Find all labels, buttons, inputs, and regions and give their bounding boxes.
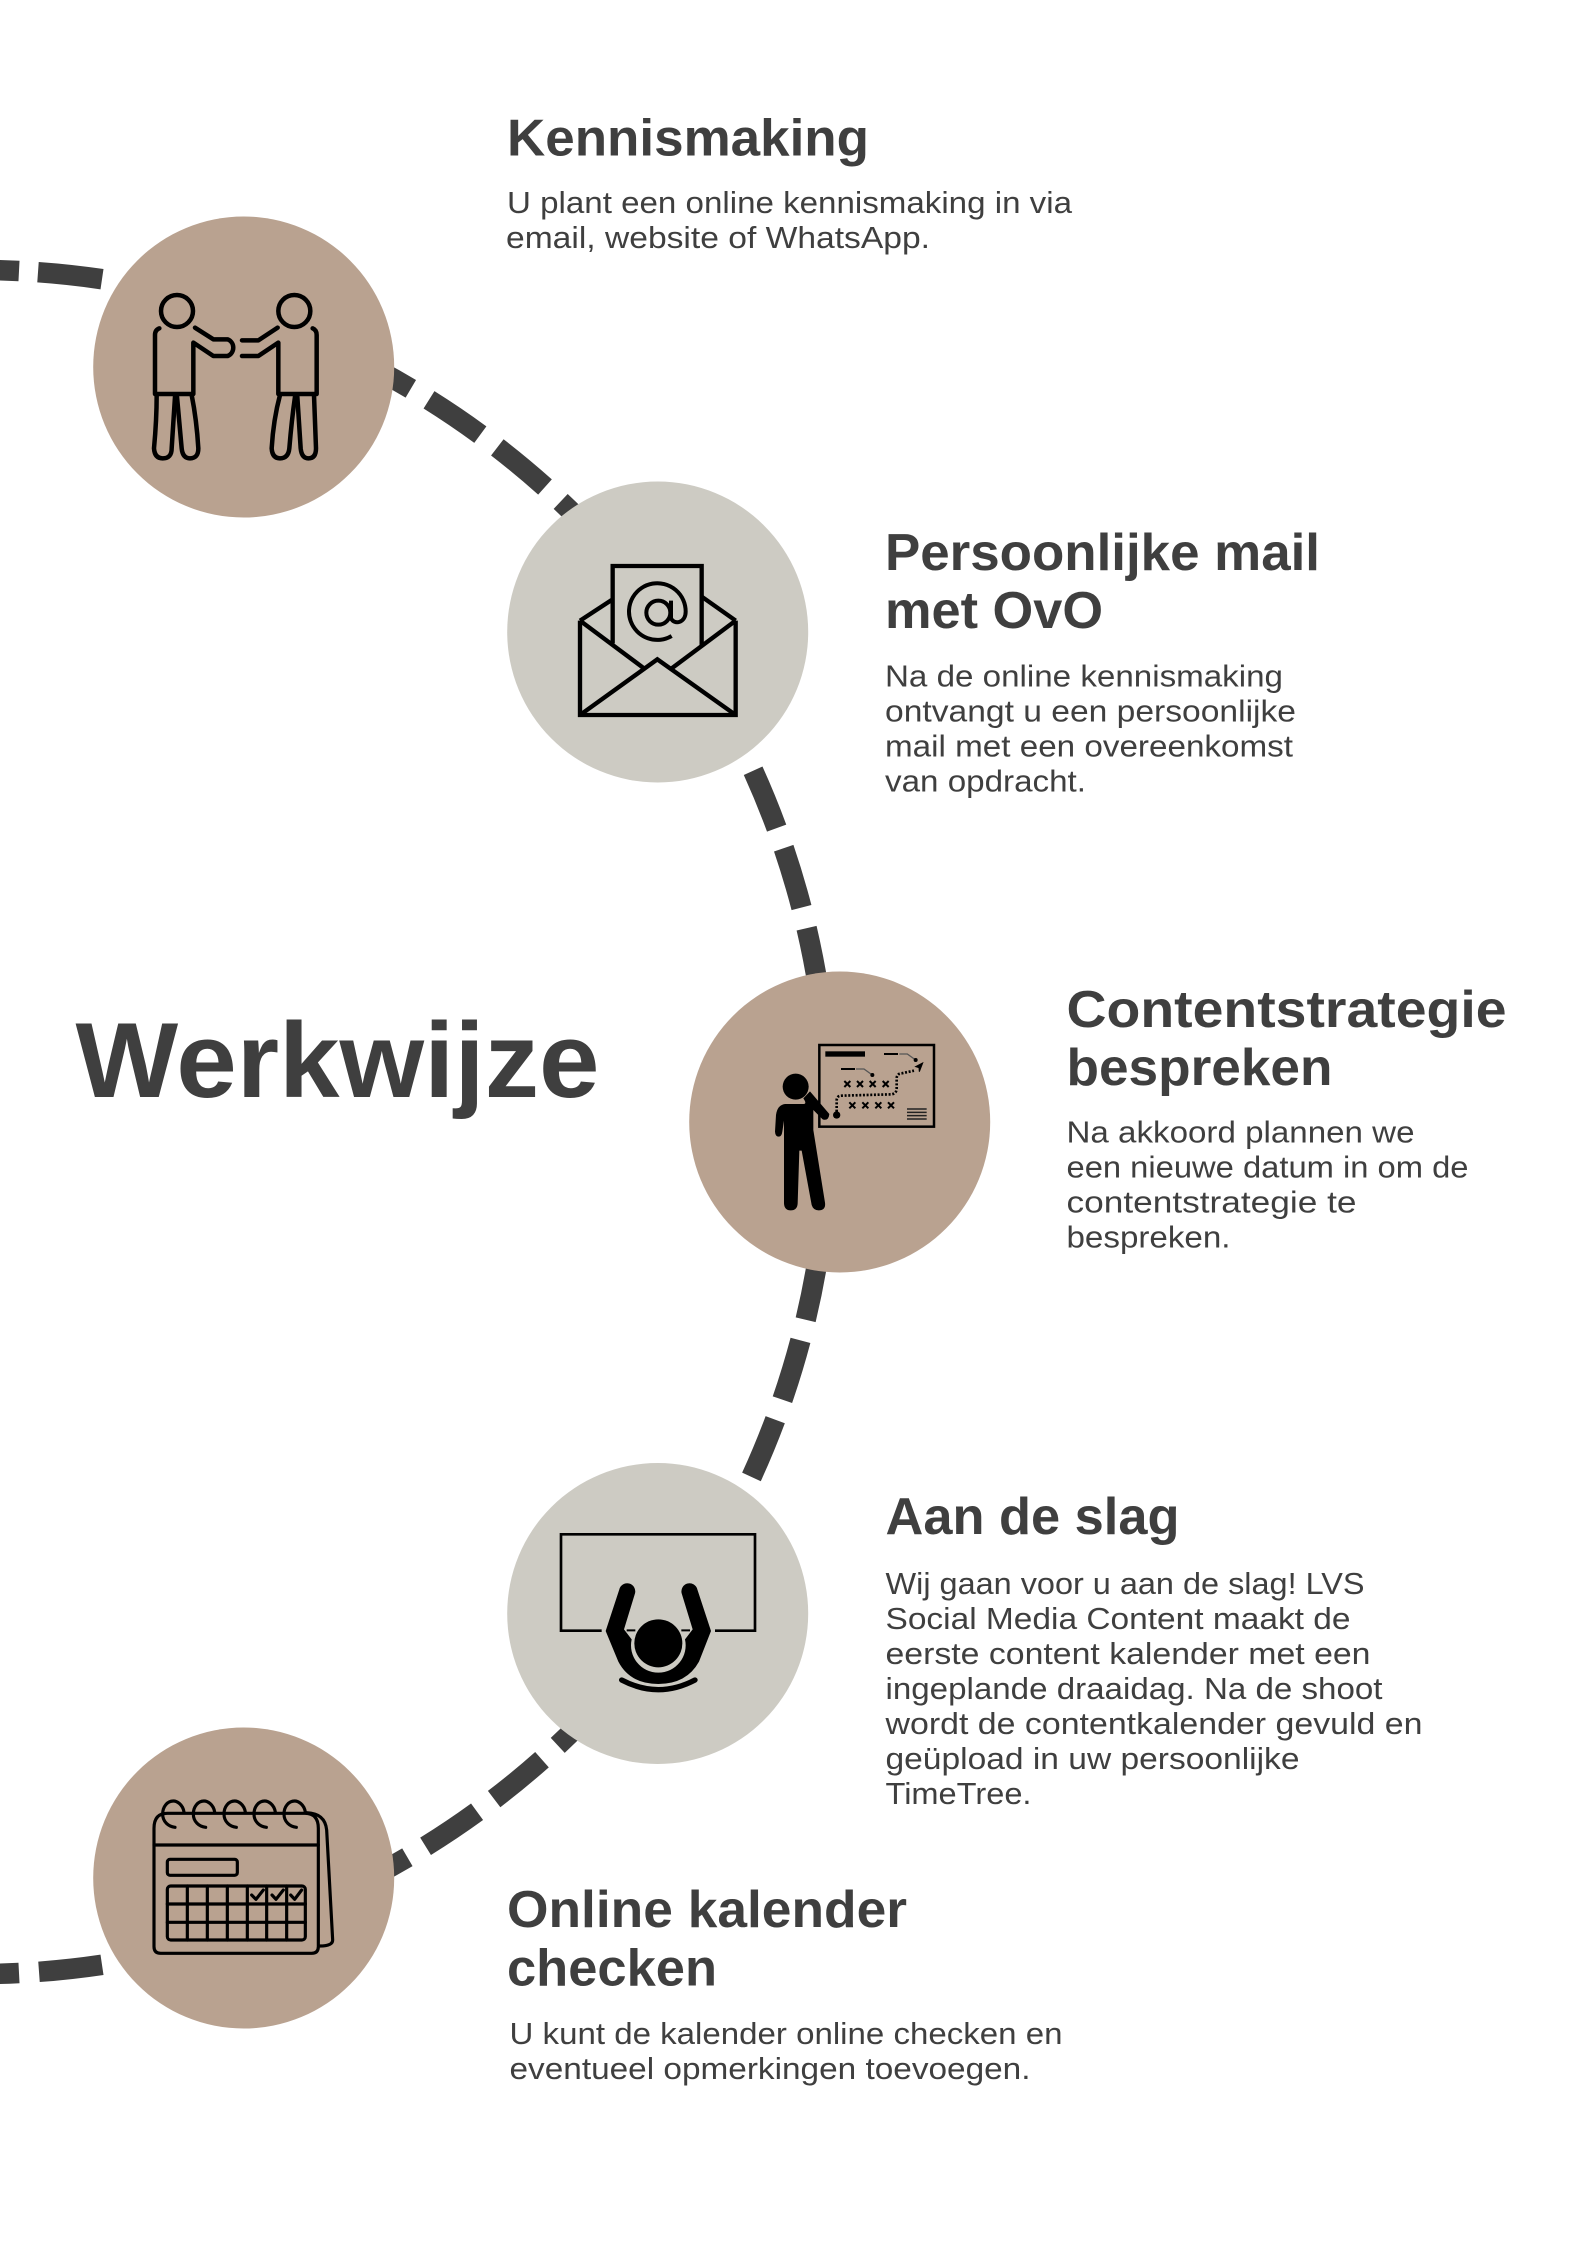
step 1 text (506, 185, 1073, 255)
step 1 text: email, website of WhatsApp. (506, 220, 930, 255)
step 3 heading: Contentstrategie (1066, 981, 1506, 1039)
step 4 text: Wij gaan voor u aan de slag! LVS (886, 1566, 1364, 1601)
step 4 text: wordt de contentkalender gevuld en (884, 1706, 1422, 1741)
step 3 text: contentstrategie te (1066, 1185, 1356, 1220)
circle: step 3 (689, 972, 990, 1272)
step 4 text: TimeTree. (886, 1776, 1032, 1811)
dashed arc connecting the steps (0, 270, 829, 1974)
step 5 text (510, 2016, 1062, 2086)
step 4 text: eerste content kalender met een (886, 1636, 1370, 1671)
step 4 text: ingeplande draaidag. Na de shoot (886, 1671, 1383, 1706)
icon: calendar with check marks (154, 1801, 333, 1953)
step 2 heading: Persoonlijke mail (885, 524, 1320, 582)
step 4 text: Social Media Content maakt de (886, 1601, 1350, 1636)
step 2 text (885, 659, 1296, 799)
icon: two people shaking hands (154, 295, 317, 458)
step 5 heading (507, 1881, 907, 1998)
step 5 heading: Online kalender (507, 1881, 907, 1939)
circle: step 1 (93, 216, 394, 518)
step 3 heading (1066, 981, 1506, 1097)
circle: step 2 (507, 482, 808, 782)
step 4 text: geüpload in uw persoonlijke (886, 1741, 1300, 1776)
step 5 text: eventueel opmerkingen toevoegen. (510, 2051, 1030, 2086)
icon: person at a desk seen from above (561, 1534, 755, 1690)
step 3 text: een nieuwe datum in om de (1066, 1150, 1468, 1185)
step 5 heading: checken (507, 1940, 717, 1998)
step 2 text: ontvangt u een persoonlijke (885, 694, 1296, 729)
circle: step 5 (93, 1728, 394, 2028)
step 1 text: U plant een online kennismaking in via (507, 185, 1073, 220)
step 2 heading: met OvO (885, 582, 1103, 640)
icon: open envelope with at sign (580, 566, 736, 715)
step 4 text (884, 1566, 1422, 1811)
step 3 text: bespreken. (1066, 1220, 1230, 1255)
step 4 heading: Aan de slag (886, 1488, 1180, 1546)
step 2 text: mail met een overeenkomst (885, 729, 1293, 764)
step 3 text (1066, 1115, 1468, 1255)
step 1 heading: Kennismaking (507, 110, 869, 168)
step 2 heading (885, 524, 1320, 640)
step 3 text: Na akkoord plannen we (1066, 1115, 1414, 1150)
icon: person presenting strategy on a board (775, 1045, 934, 1210)
title: Werkwijze (76, 1000, 600, 1120)
step 3 heading: bespreken (1066, 1039, 1332, 1097)
step 2 text: van opdracht. (885, 764, 1086, 799)
step 5 text: U kunt de kalender online checken en (510, 2016, 1062, 2051)
step 2 text: Na de online kennismaking (885, 659, 1283, 694)
circle: step 4 (507, 1463, 808, 1764)
